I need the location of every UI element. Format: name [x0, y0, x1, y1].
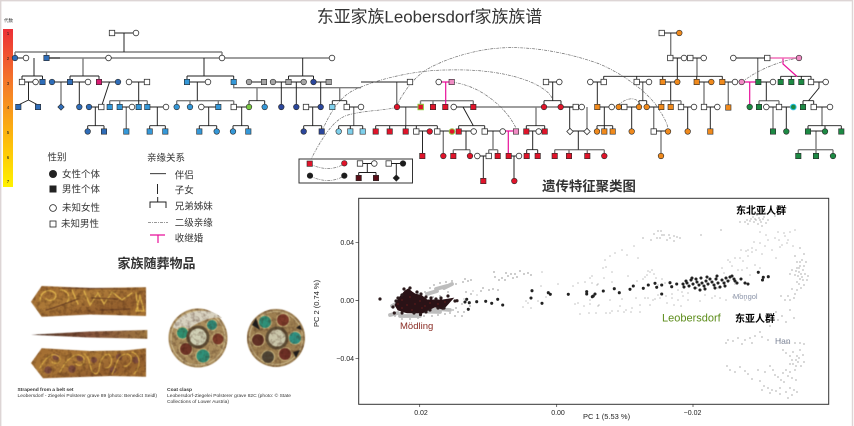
legend: relationship: 二级亲缘 [175, 217, 213, 229]
label: East Asian populations: 东亚人群 [735, 312, 775, 325]
generation colour scale [3, 17, 13, 187]
label: Mongol: Mongol [733, 292, 758, 301]
plot frame and axes: 0.00 [340, 298, 354, 305]
caption: strap end [18, 387, 157, 398]
label: Northeast Asian populations: 东北亚人群 [736, 204, 786, 217]
generation colour scale: 2 [7, 56, 10, 61]
caption: coat clasp: Coat clasp [167, 387, 192, 392]
pedigree connecting lines [15, 33, 841, 181]
heading: PCA: 遗传特征聚类图 [542, 178, 636, 194]
legend: relationship: 兄弟姊妹 [175, 200, 213, 212]
legend: relationship: 伴侣 [175, 170, 194, 182]
legend: sex: 男性个体 [62, 184, 101, 196]
legend: sex: 未知女性 [62, 202, 101, 214]
generation colour scale: 3 [7, 81, 10, 86]
photo: coat clasp, right [247, 309, 305, 367]
plot frame and axes: −0.02 [684, 410, 701, 417]
plot frame and axes: 0.04 [340, 240, 354, 247]
legend: sex [48, 152, 101, 230]
caption: strap end: Strapend from a belt set [18, 387, 74, 392]
plot frame and axes: 0.02 [414, 410, 428, 417]
legend: relationship: 子女 [175, 184, 194, 196]
plot frame and axes: PC 2 (0.74 %) [312, 279, 321, 327]
family: orange lineage [573, 30, 738, 159]
generation colour scale: 4 [7, 105, 10, 110]
legend: relationship: 亲缘关系 [147, 152, 185, 164]
caption: coat clasp: Leobersdorf-Ziegelei Polsterer grave 82C (photo: © State [167, 392, 291, 398]
plot frame and axes [312, 198, 829, 421]
black Leobersdorf and Mödling sample points [380, 272, 768, 314]
label: Mödling: Mödling [400, 321, 433, 332]
PCA scatter plot [312, 198, 829, 421]
photo: strap end [31, 286, 147, 378]
heading: burial goods: 家族随葬物品 [117, 256, 196, 271]
grey reference population points [390, 208, 808, 398]
label: Leobersdorf: Leobersdorf [662, 312, 722, 324]
legend: relationship: 收继婚 [175, 232, 204, 244]
second-degree relationship arcs [310, 48, 798, 161]
legend: sex: 未知男性 [61, 218, 100, 230]
photo: coat clasp, left [168, 308, 228, 368]
pedigree chart [12, 30, 844, 184]
generation colour scale: 代数 [4, 17, 13, 24]
plot frame and axes: 0.00 [551, 410, 565, 417]
caption: strap end: Leobersdorf - Ziegelei Polsterer grave 89 (photo: Benedict Seidl) [18, 393, 157, 398]
label: Han: Han [775, 336, 791, 346]
plot frame and axes: PC 1 (5.53 %) [583, 412, 631, 421]
generation colour scale: 1 [7, 31, 10, 36]
generation colour scale: 7 [7, 179, 10, 184]
title: 东亚家族Leobersdorf家族族谱 [317, 8, 542, 26]
generation colour scale: 5 [7, 130, 10, 135]
legend: sex: 女性个体 [62, 168, 101, 180]
plot frame and axes: −0.04 [336, 356, 354, 363]
legend: sex: 性别 [48, 152, 67, 164]
generation colour scale: 6 [7, 155, 10, 160]
legend: relationship [147, 152, 213, 244]
family: green lineage [730, 55, 844, 159]
caption: coat clasp: Collections of Lower Austria) [167, 399, 229, 404]
inset box: distant relatives [299, 159, 412, 183]
family: red lineage [373, 79, 607, 184]
family: blue lineage [12, 30, 365, 134]
caption: coat clasp [167, 387, 291, 404]
